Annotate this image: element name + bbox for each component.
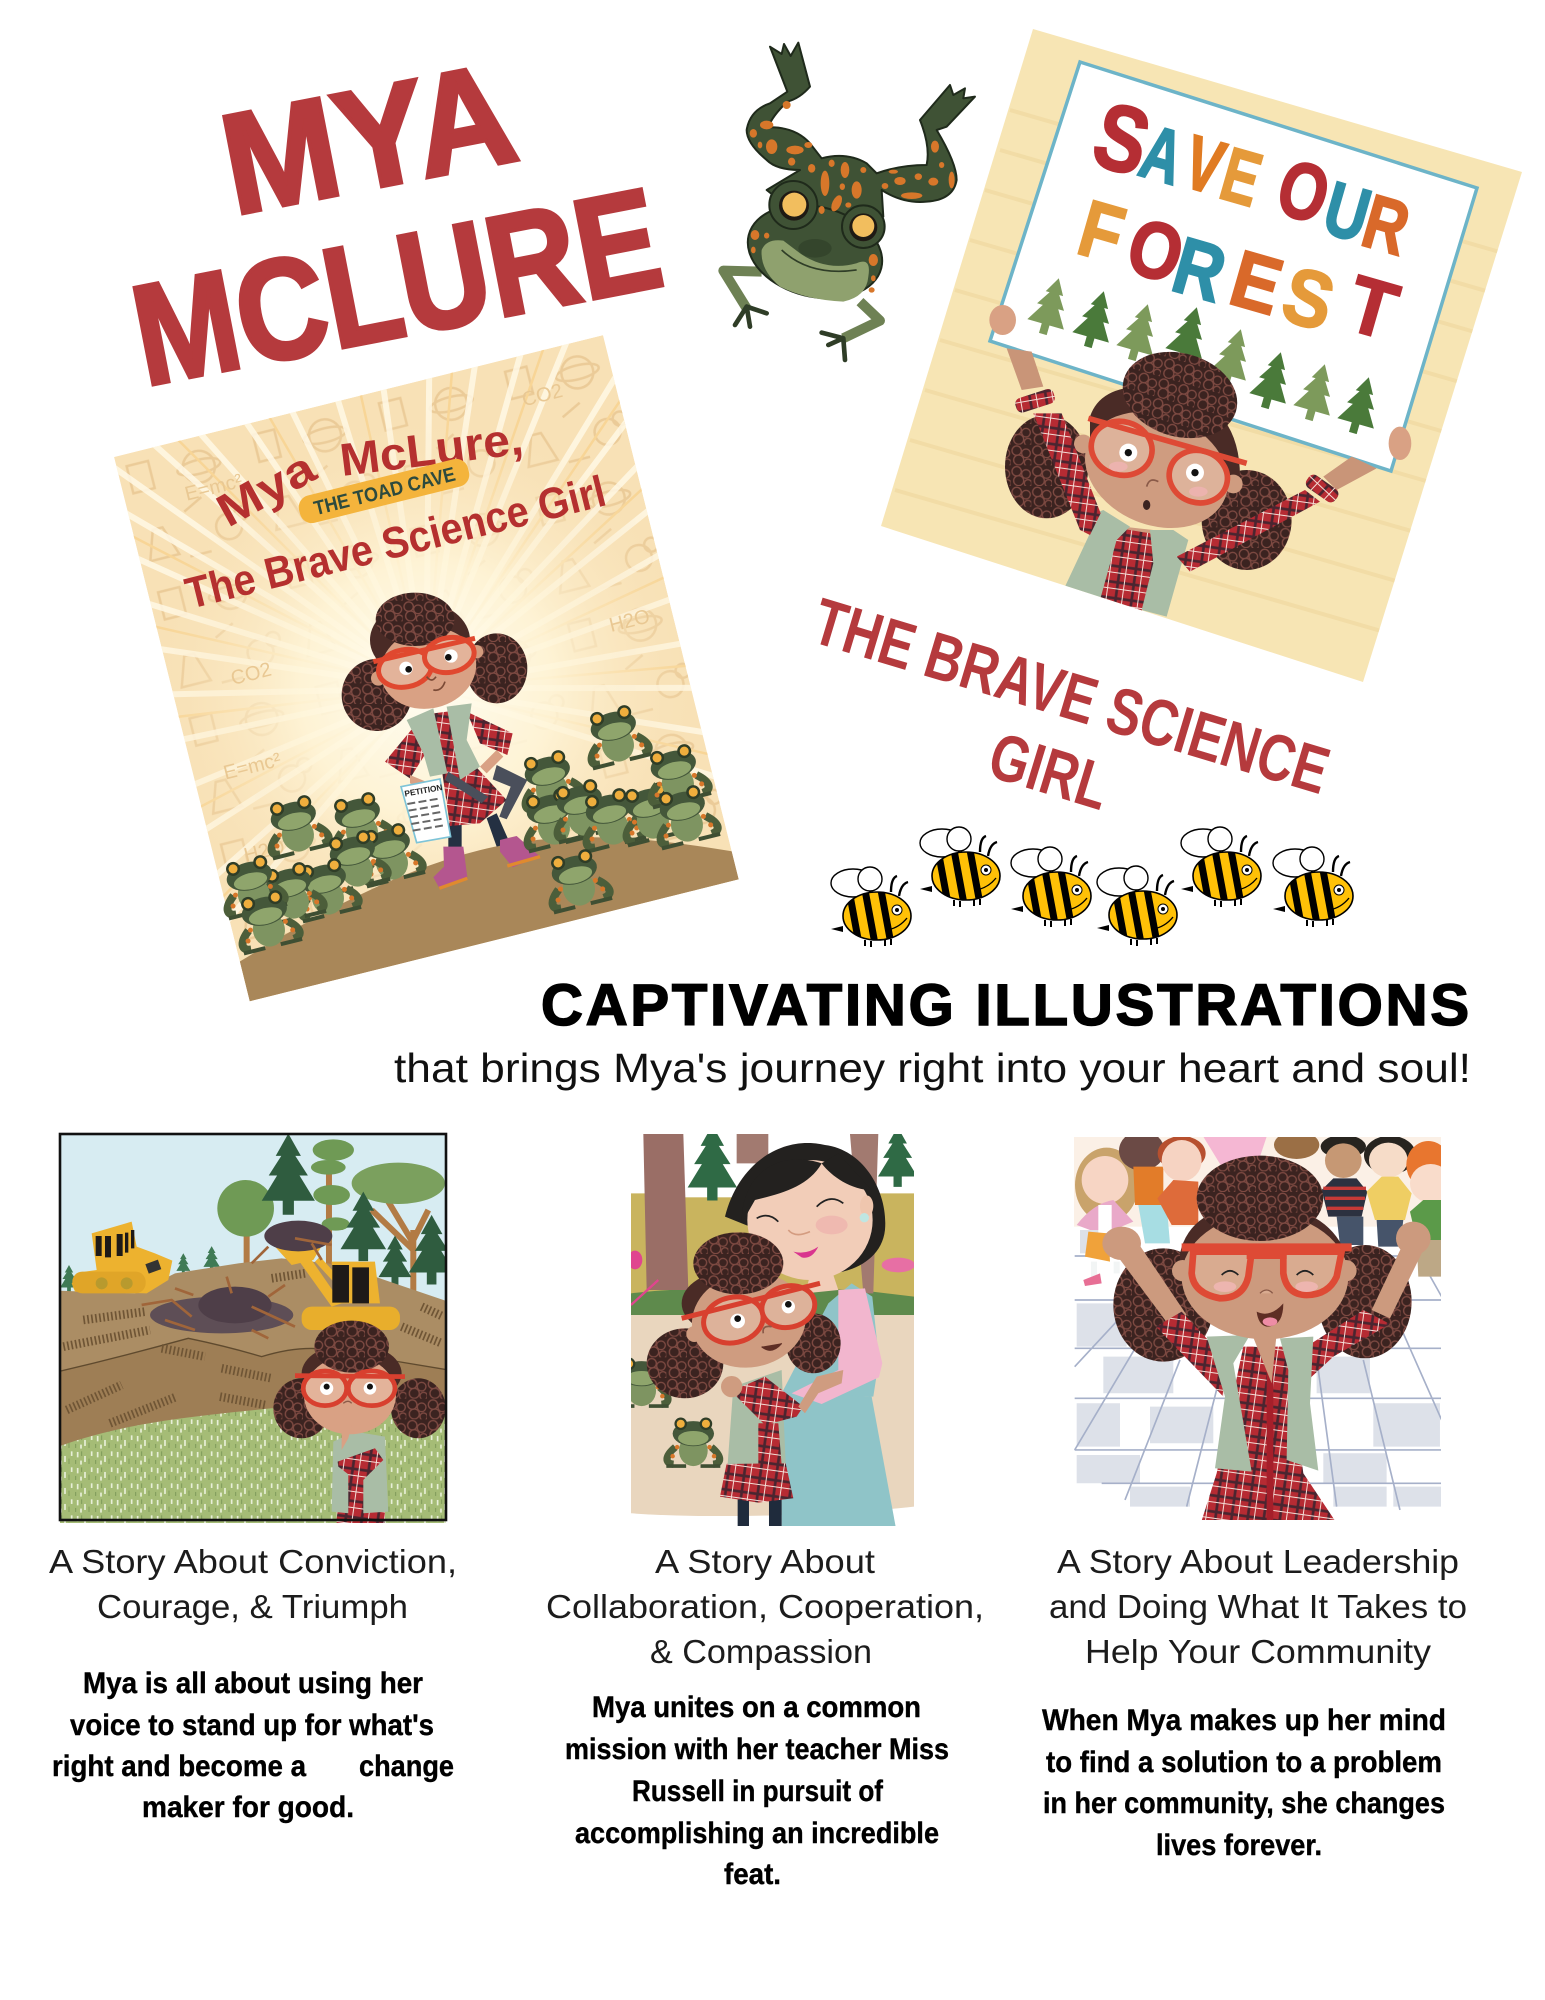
protest sign — [990, 62, 1477, 471]
illustration: Save Our Forest sign: E — [1212, 132, 1270, 224]
title: MYA MCLURE: MCLURE — [121, 159, 673, 416]
column 3 body: lives forever. — [1156, 1829, 1322, 1862]
cover frogs — [216, 701, 720, 953]
excavator with bucket — [252, 1221, 400, 1330]
column 1 caption — [49, 1543, 457, 1625]
book cover: Mya McLure, The Brave Science Girl: CO2 — [229, 659, 274, 690]
debris pile — [142, 1277, 295, 1338]
illustration: Save Our Forest sign: O — [1268, 143, 1339, 242]
illustration: Save Our Forest sign: S — [1273, 250, 1344, 349]
Mya standing with petition — [342, 593, 540, 889]
column 3 body — [1042, 1704, 1446, 1862]
Mya hugging — [647, 1232, 843, 1527]
book title text: McLure, — [337, 412, 526, 486]
column 2 body: feat. — [724, 1858, 781, 1891]
book cover: Mya McLure, The Brave Science Girl — [114, 335, 739, 1002]
illustration: Save Our Forest sign: R — [1354, 179, 1418, 272]
illustration: Save Our Forest sign: R — [1164, 220, 1236, 319]
book title text: The Brave Science Girl — [181, 467, 611, 619]
book cover: Mya McLure, The Brave Science Girl: H2O — [242, 836, 287, 867]
illustration: Save Our Forest sign — [881, 29, 1522, 682]
subtitle: The Brave Science Girl: GIRL — [981, 718, 1118, 824]
column 1 body: Mya is all about using her — [83, 1667, 423, 1700]
Miss Russell — [725, 1143, 896, 1527]
column 1 body: change — [359, 1750, 454, 1783]
illustration: Save Our Forest sign: S — [1083, 82, 1161, 197]
column 2 body: Russell in pursuit of — [632, 1775, 884, 1808]
illustration: Save Our Forest sign: F — [1069, 183, 1134, 280]
column 1 caption: Courage, & Triumph — [97, 1588, 408, 1625]
subheading: that brings Mya's journey right into your heart and soul! — [394, 1045, 1471, 1091]
forest trees — [60, 1134, 454, 1293]
column 3 body: to find a solution to a problem — [1046, 1746, 1442, 1779]
Mya worried — [273, 1321, 446, 1523]
book title text: Mya — [208, 441, 324, 537]
title: MYA MCLURE — [121, 33, 673, 416]
illustration: Save Our Forest sign: U — [1315, 166, 1379, 259]
illustration: Save Our Forest sign: E — [1221, 234, 1292, 333]
column 3 caption: and Doing What It Takes to — [1049, 1588, 1467, 1625]
ground — [240, 837, 739, 1002]
column 1 body: right and become a — [52, 1750, 306, 1783]
illustration: Save Our Forest sign: V — [1175, 120, 1233, 212]
heading: captivating illustrations: CAPTIVATING ILLUSTRATIONS — [541, 973, 1469, 1038]
column 1 body: maker for good. — [142, 1791, 354, 1824]
Mya holding sign — [989, 305, 1411, 617]
grass — [58, 1408, 448, 1527]
column 3 body: in her community, she changes — [1043, 1787, 1445, 1820]
column 2 body — [565, 1691, 949, 1891]
column 3 body: When Mya makes up her mind — [1042, 1704, 1446, 1737]
column 1 caption: A Story About Conviction, — [49, 1543, 457, 1580]
title: MYA MCLURE: MYA — [210, 33, 528, 245]
column 2 caption: A Story About — [655, 1543, 875, 1580]
column 2 caption: & Compassion — [650, 1633, 872, 1670]
column 2 body: Mya unites on a common — [592, 1691, 921, 1724]
book cover: Mya McLure, The Brave Science Girl: CO2 — [520, 380, 565, 411]
column 1 body — [52, 1667, 454, 1824]
book title text: THE TOAD CAVE — [312, 464, 458, 520]
illustration: Save Our Forest sign: T — [1338, 258, 1407, 357]
Mya cheering figure — [1102, 1156, 1431, 1521]
panel image: Mya cheering — [1073, 1131, 1451, 1521]
floor tiles — [1075, 1230, 1442, 1510]
dirt hill — [61, 1258, 445, 1370]
icon: leaping toad — [723, 43, 975, 360]
column 2 caption: Collaboration, Cooperation, — [546, 1588, 984, 1625]
column 2 body: mission with her teacher Miss — [565, 1733, 949, 1766]
column 3 caption: A Story About Leadership — [1057, 1543, 1459, 1580]
panel image: Mya and Miss Russell — [615, 1125, 917, 1527]
book cover: Mya McLure, The Brave Science Girl: E=mc² — [183, 470, 245, 506]
classmates — [1075, 1131, 1451, 1286]
icon row: six bees — [831, 827, 1353, 947]
Mya standing with petition: PETITION — [404, 782, 443, 799]
column 2 caption — [546, 1543, 984, 1670]
bulldozer left — [72, 1222, 172, 1293]
illustration: Save Our Forest sign: A — [1131, 109, 1193, 202]
column 2 body: accomplishing an incredible — [575, 1817, 939, 1850]
column 3 caption: Help Your Community — [1085, 1633, 1432, 1670]
book cover: Mya McLure, The Brave Science Girl: E=mc² — [221, 749, 284, 784]
subtitle: The Brave Science Girl: THE BRAVE SCIENCE — [805, 584, 1338, 808]
panel image: bulldozers and Mya — [58, 1132, 454, 1527]
small frogs — [666, 1417, 720, 1466]
illustration: Save Our Forest sign: O — [1118, 200, 1193, 301]
column 3 caption — [1049, 1543, 1467, 1670]
book cover: Mya McLure, The Brave Science Girl: H2O — [607, 605, 652, 637]
forest background — [628, 1125, 917, 1305]
column 1 body: voice to stand up for what's — [70, 1709, 434, 1742]
